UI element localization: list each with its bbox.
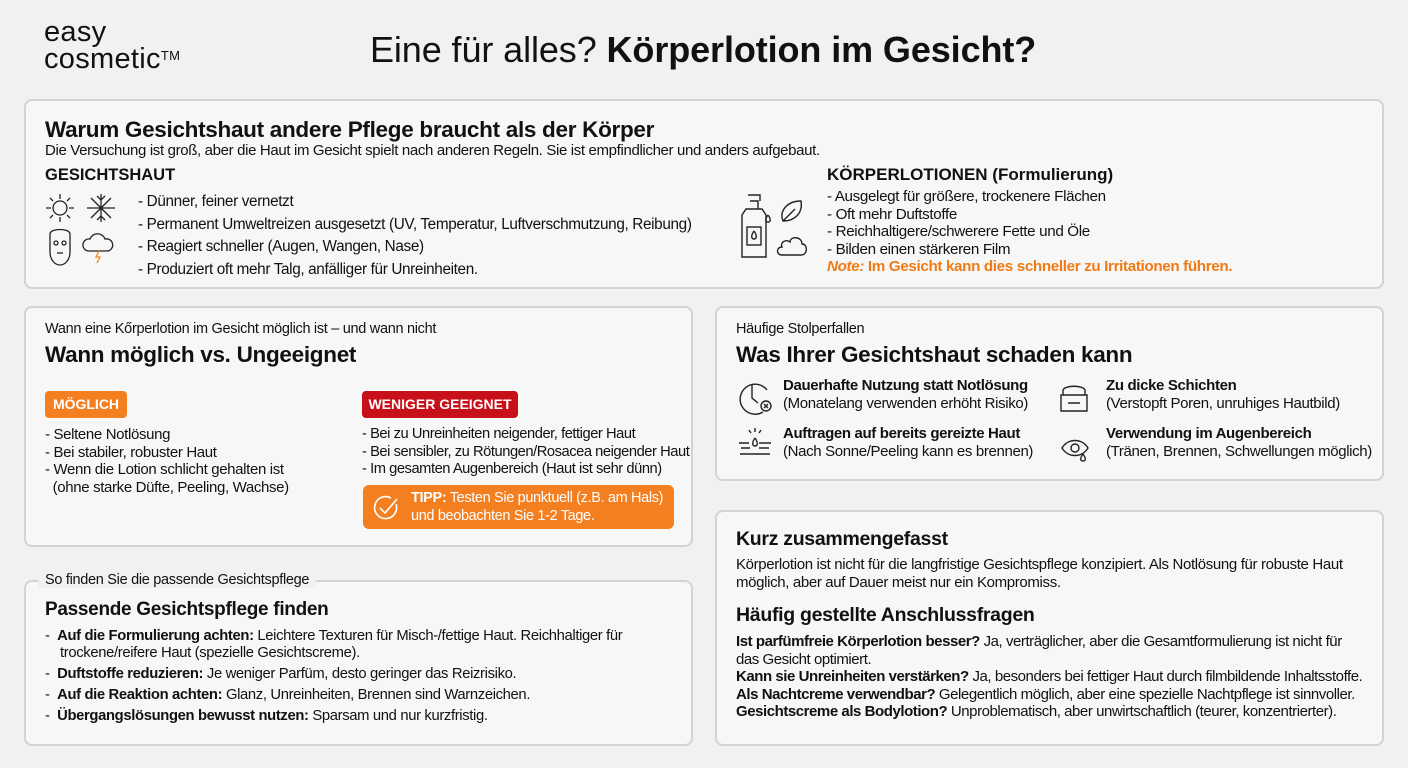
item 1: [783, 377, 1028, 412]
list koerperlotionen: - Ausgelegt für größere, trockenere Flächen: [827, 188, 1106, 205]
item 4: (Tränen, Brennen, Schwellungen möglich): [1106, 442, 1372, 460]
list gesichtshaut: - Produziert oft mehr Talg, anfälliger für Unreinheiten.: [138, 260, 478, 278]
panel: stolperfallen: [715, 306, 1384, 481]
list moeglich: [45, 426, 289, 496]
item 4: Verwendung im Augenbereich: [1106, 425, 1311, 442]
list: - Auf die Formulierung achten: Leichtere Texturen für Misch-/fettige Haut. Reichhaltiger für: [45, 628, 622, 644]
item 2: Auftragen auf bereits gereizte Haut: [783, 425, 1020, 442]
faq list: [736, 633, 1362, 720]
faq list: Kann sie Unreinheiten verstärken? Ja, besonders bei fettiger Haut durch filmbildende Inhaltsstoffe.: [736, 668, 1362, 685]
list koerperlotionen: - Reichhaltigere/schwerere Fette und Öle: [827, 223, 1090, 240]
summary text: möglich, aber auf Dauer meist nur ein Kompromiss.: [736, 574, 1061, 590]
panel: zusammenfassung & faq: [715, 510, 1384, 746]
badge moeglich: [45, 391, 127, 418]
badge moeglich: MÖGLICH: [53, 396, 119, 412]
heading: Warum Gesichtshaut andere Pflege braucht als der Körper: [45, 117, 654, 142]
list koerperlotionen: - Oft mehr Duftstoffe: [827, 206, 957, 222]
heading faq: Häufig gestellte Anschlussfragen: [736, 604, 1034, 626]
summary text: [736, 556, 1343, 590]
list: - Übergangslösungen bewusst nutzen: Sparsam und nur kurzfristig.: [45, 708, 488, 724]
heading: Was Ihrer Gesichtshaut schaden kann: [736, 342, 1132, 367]
item 3: Zu dicke Schichten: [1106, 377, 1236, 394]
list weniger geeignet: - Im gesamten Augenbereich (Haut ist sehr dünn): [362, 461, 662, 477]
list koerperlotionen: Note: Im Gesicht kann dies schneller zu Irritationen führen.: [827, 258, 1232, 275]
logo: [44, 16, 180, 75]
item 4: [1106, 425, 1372, 460]
panel: wann moeglich: [24, 306, 693, 547]
logo: cosmeticTM: [44, 43, 180, 75]
list weniger geeignet: - Bei zu Unreinheiten neigender, fettiger Haut: [362, 426, 635, 442]
title: Eine für alles? Körperlotion im Gesicht?: [370, 29, 1036, 70]
callout tipp: [363, 485, 674, 529]
badge weniger geeignet: WENIGER GEEIGNET: [368, 396, 512, 412]
icon: check: [374, 496, 398, 520]
intro: Die Versuchung ist groß, aber die Haut im Gesicht spielt nach anderen Regeln. Sie ist empfindlicher und anders aufgebaut.: [45, 142, 820, 159]
panel: passende gesichtspflege: [24, 580, 693, 746]
item 2: [783, 425, 1033, 460]
summary text: Körperlotion ist nicht für die langfristige Gesichtspflege konzipiert. Als Notlösung für robuste Haut: [736, 556, 1343, 573]
callout tipp: und beobachten Sie 1-2 Tage.: [411, 508, 594, 524]
item 1: (Monatelang verwenden erhöht Risiko): [783, 394, 1028, 412]
item 1: Dauerhafte Nutzung statt Notlösung: [783, 377, 1028, 394]
list koerperlotionen: [827, 188, 1232, 275]
list gesichtshaut: - Reagiert schneller (Augen, Wangen, Nase): [138, 238, 424, 255]
list moeglich: (ohne starke Düfte, Peeling, Wachse): [53, 478, 289, 496]
kicker: Häufige Stolperfallen: [736, 321, 864, 337]
item 3: (Verstopft Poren, unruhiges Hautbild): [1106, 394, 1340, 412]
list: trockene/reifere Haut (spezielle Gesichtscreme).: [60, 645, 360, 661]
list gesichtshaut: - Dünner, feiner vernetzt: [138, 193, 293, 210]
legend kicker: So finden Sie die passende Gesichtspflege: [45, 572, 309, 588]
subheading gesichtshaut: GESICHTSHAUT: [45, 166, 175, 184]
list: - Auf die Reaktion achten: Glanz, Unreinheiten, Brennen sind Warnzeichen.: [45, 687, 530, 703]
item 3: [1106, 377, 1340, 412]
icons: bottle leaf cream: [741, 194, 808, 258]
list: [45, 628, 622, 724]
faq list: das Gesicht optimiert.: [736, 650, 871, 668]
faq list: Gesichtscreme als Bodylotion? Unproblematisch, aber unwirtschaftlich (teurer, konzentrierter).: [736, 703, 1336, 720]
list moeglich: - Bei stabiler, robuster Haut: [45, 444, 217, 460]
list moeglich: - Seltene Notlösung: [45, 426, 170, 443]
list weniger geeignet: - Bei sensibler, zu Rötungen/Rosacea neigender Haut: [362, 444, 689, 460]
list koerperlotionen: - Bilden einen stärkeren Film: [827, 240, 1010, 258]
icons: [739, 384, 1089, 462]
list weniger geeignet: [362, 426, 690, 477]
heading: Wann möglich vs. Ungeeignet: [45, 342, 356, 367]
list: - Duftstoffe reduzieren: Je weniger Parfüm, desto geringer das Reizrisiko.: [45, 666, 516, 682]
panel: warum gesichtshaut: [24, 99, 1384, 289]
list gesichtshaut: - Permanent Umweltreizen ausgesetzt (UV, Temperatur, Luftverschmutzung, Reibung): [138, 216, 692, 232]
callout tipp: TIPP: Testen Sie punktuell (z.B. am Hals): [411, 490, 663, 506]
badge weniger geeignet: [362, 391, 518, 418]
faq list: Als Nachtcreme verwendbar? Gelegentlich möglich, aber eine spezielle Nachtpflege ist sinnvoller.: [736, 686, 1355, 702]
faq list: Ist parfümfreie Körperlotion besser? Ja, verträglicher, aber die Gesamtformulierung ist nicht für: [736, 633, 1342, 650]
subheading koerperlotionen: KÖRPERLOTIONEN (Formulierung): [827, 165, 1113, 184]
list gesichtshaut: [138, 193, 692, 278]
item 2: (Nach Sonne/Peeling kann es brennen): [783, 442, 1033, 460]
heading: Passende Gesichtspflege finden: [45, 599, 328, 620]
icons: sun snow face cloud: [46, 194, 115, 266]
kicker: Wann eine Kőrperlotion im Gesicht möglich ist – und wann nicht: [45, 321, 436, 337]
logo: easy: [44, 16, 106, 48]
list moeglich: - Wenn die Lotion schlicht gehalten ist: [45, 461, 284, 478]
heading summary: Kurz zusammengefasst: [736, 528, 948, 550]
